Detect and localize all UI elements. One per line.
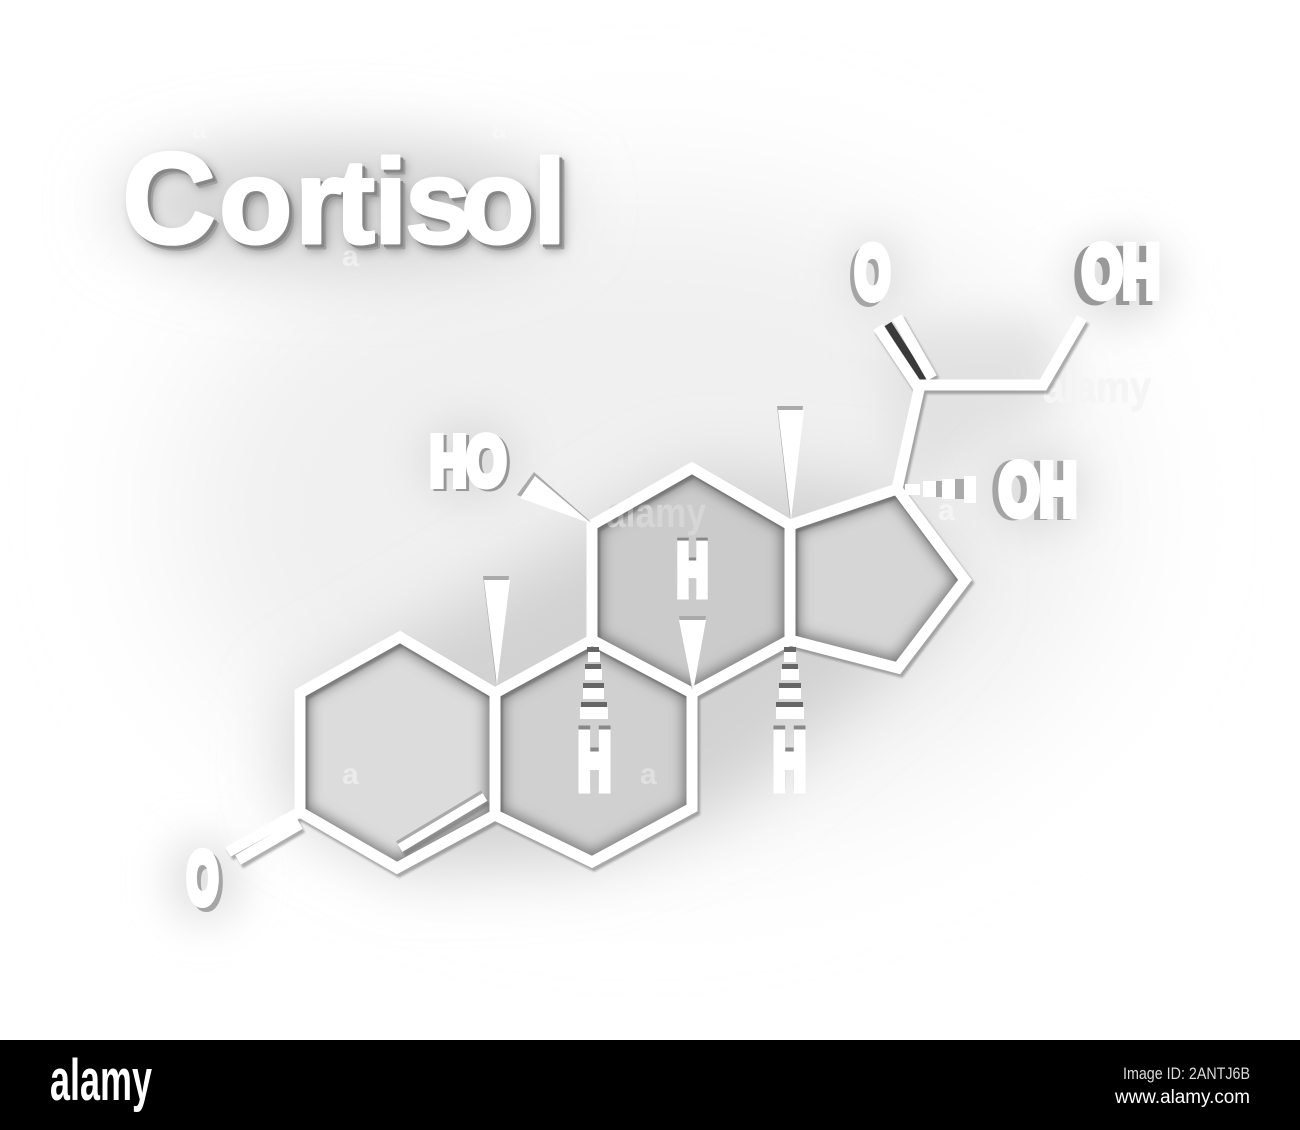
hashed bonds bbox=[580, 476, 976, 719]
footer image id: Image ID: 2ANTJ6B bbox=[1123, 1064, 1250, 1083]
watermarks: a bbox=[938, 494, 955, 527]
atom label: O (carbonyl top) bbox=[851, 231, 890, 318]
atom label: O (carbonyl top): O bbox=[851, 235, 886, 318]
atom label: H (centre): H bbox=[677, 528, 708, 608]
footer logo: alamy: alamy bbox=[50, 1048, 152, 1113]
skeletal rings and side chain bbox=[228, 317, 1082, 868]
atom label: OH (top right): OH bbox=[1082, 230, 1160, 313]
watermarks: alamy bbox=[606, 489, 707, 536]
atom label: O (carbonyl top): O bbox=[855, 231, 890, 314]
atom label: OH (hydroxyl right): OH bbox=[999, 448, 1077, 531]
atom label: OH (hydroxyl right): OH bbox=[993, 449, 1071, 532]
watermarks: alamy bbox=[1043, 363, 1151, 412]
atom label: H (left): H bbox=[578, 717, 611, 806]
atom label: H (centre): H bbox=[677, 531, 708, 611]
title: Cortisol: Cortisol bbox=[127, 130, 571, 276]
atom label: H (left) bbox=[578, 713, 611, 806]
atom label: O (ketone bottom) bbox=[187, 839, 222, 923]
watermarks: a bbox=[492, 114, 507, 144]
atom label: H (centre) bbox=[677, 528, 708, 611]
title: Cortisol: Cortisol bbox=[127, 131, 571, 277]
atom label: H (right): H bbox=[773, 717, 806, 806]
atom label: HO: HO bbox=[433, 424, 509, 502]
title: Cortisol: Cortisol bbox=[125, 128, 569, 274]
wedge bonds bbox=[483, 406, 804, 692]
molecule bonds bbox=[228, 317, 1084, 871]
watermarks: a bbox=[342, 240, 359, 273]
atom label: H (right) bbox=[773, 713, 806, 806]
title: Cortisol: Cortisol bbox=[122, 125, 566, 271]
atom label: O (ketone bottom): O bbox=[187, 839, 218, 919]
atom label: HO: HO bbox=[430, 422, 506, 500]
watermarks: a bbox=[192, 114, 207, 144]
watermarks: a bbox=[342, 758, 359, 791]
atom label: H (left): H bbox=[578, 713, 611, 802]
footer website: www.alamy.com bbox=[1114, 1087, 1250, 1108]
atom label: OH (top right): OH bbox=[1075, 234, 1153, 317]
atom label: H (right): H bbox=[773, 713, 806, 802]
footer bar bbox=[0, 1040, 1300, 1130]
watermarks: a bbox=[640, 758, 657, 791]
watermarks bbox=[192, 114, 1151, 791]
ring interiors bbox=[300, 468, 965, 868]
atom label: O (ketone bottom): O bbox=[191, 843, 222, 923]
